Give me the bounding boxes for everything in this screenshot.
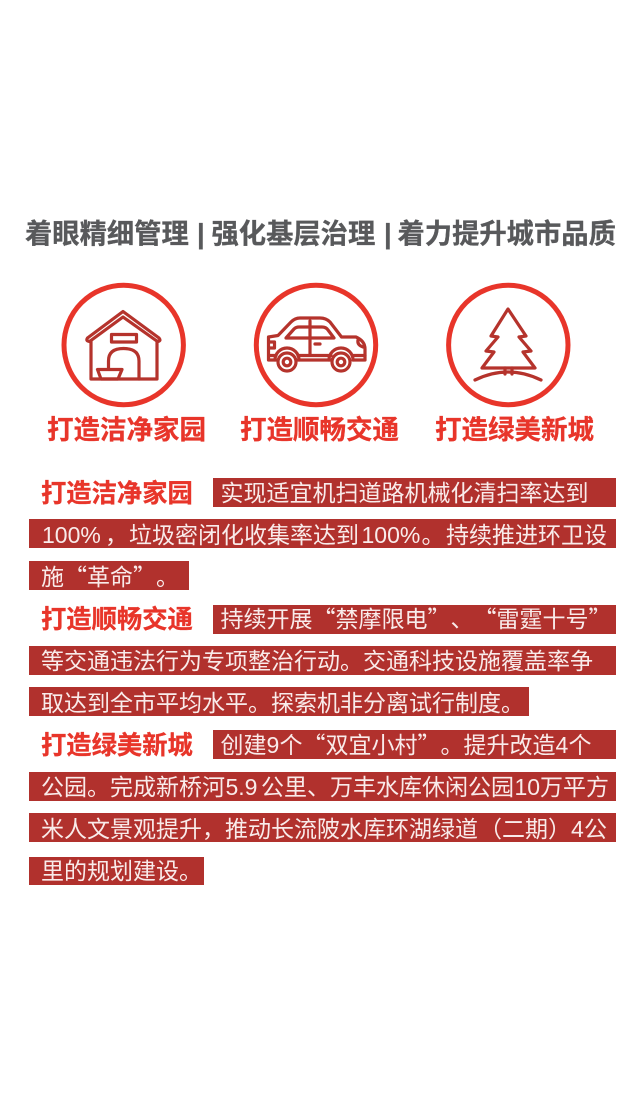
line 2: 万丰水库休闲公园 [330, 774, 514, 800]
title: | [197, 218, 205, 249]
title: 着力提升城市品质 [398, 218, 616, 249]
line 2: 垃圾密闭化收集率达到 [129, 522, 359, 548]
caption: smooth traffic: 打造顺畅交通 [240, 415, 399, 445]
line 3: 。 [156, 564, 179, 590]
caption: green city: 打造绿美新城 [435, 415, 594, 445]
line 1: 持续开展 [220, 606, 312, 632]
section heading: 打造洁净家园 [41, 480, 193, 508]
line 4: 里的规划建设。 [41, 858, 202, 884]
line 1: 、 [450, 606, 474, 632]
line 3: “ [64, 558, 87, 592]
line 1: 雷霆十号 [496, 606, 588, 632]
icon: car in circle [256, 285, 376, 405]
line 3: 4 [571, 816, 584, 842]
line 1: 实现适宜机扫道路机械化清扫率达到 [220, 480, 588, 506]
line 2: ， [105, 522, 128, 548]
icon: tree in circle [449, 285, 568, 405]
line 3: 革命 [87, 564, 133, 590]
section: clean home [29, 478, 616, 592]
line 3: 米人文景观提升，推动长流陂水库环湖绿道 [41, 816, 478, 842]
line 1: ” [588, 600, 612, 634]
line 3: 公 [584, 816, 607, 842]
line 2: 。 [422, 522, 444, 548]
line 1: “ [474, 600, 496, 634]
caption: clean home: 打造洁净家园 [47, 415, 206, 445]
line 3: ” [133, 558, 156, 592]
line 3: 施 [41, 564, 64, 590]
line 1: 。 [440, 732, 464, 758]
line 2: 等交通违法行为专项整治行动。交通科技设施覆盖率争 [41, 648, 593, 674]
line 2: 万平方 [540, 774, 609, 800]
icon: house in circle [64, 285, 183, 405]
line 1: ” [418, 726, 440, 760]
line 1: ” [428, 600, 450, 634]
line 1: 提升改造 [464, 732, 556, 758]
line 2 [29, 772, 616, 801]
line 1: 4 [556, 732, 568, 758]
line 1: 个 [280, 732, 302, 758]
line 3: 二期 [502, 816, 548, 842]
line 3: （ [479, 816, 502, 842]
line 2: 5.9 [226, 774, 257, 800]
line 1: 个 [568, 732, 592, 758]
section: green city [29, 726, 616, 885]
title: 着眼精细管理 [25, 218, 189, 249]
section: smooth traffic [29, 600, 616, 716]
title: | [384, 218, 392, 249]
line 1: 9 [266, 732, 279, 758]
line 2: 公里、 [261, 774, 330, 800]
line 3 [29, 558, 189, 592]
line 2 [29, 519, 616, 548]
section heading: 打造顺畅交通 [41, 606, 193, 634]
line 2: 100% [362, 522, 420, 548]
line 1: 禁摩限电 [336, 606, 428, 632]
line 2: 100% [42, 522, 101, 548]
line 1 [213, 726, 616, 760]
line 2: 公园。完成新桥河 [41, 774, 225, 800]
line 2: 持续推进环卫设 [446, 522, 607, 548]
line 1 [213, 600, 616, 634]
line 3: 取达到全市平均水平。探索机非分离试行制度。 [41, 690, 524, 716]
line 1: “ [302, 726, 326, 760]
line 1: 双宜小村 [326, 732, 418, 758]
line 3: ） [548, 816, 571, 842]
line 3 [29, 813, 616, 842]
section heading: 打造绿美新城 [41, 731, 193, 760]
line 1: 创建 [220, 732, 266, 758]
line 1: “ [312, 600, 336, 634]
line 2: 10 [514, 774, 540, 800]
title: 强化基层治理 [212, 218, 375, 249]
